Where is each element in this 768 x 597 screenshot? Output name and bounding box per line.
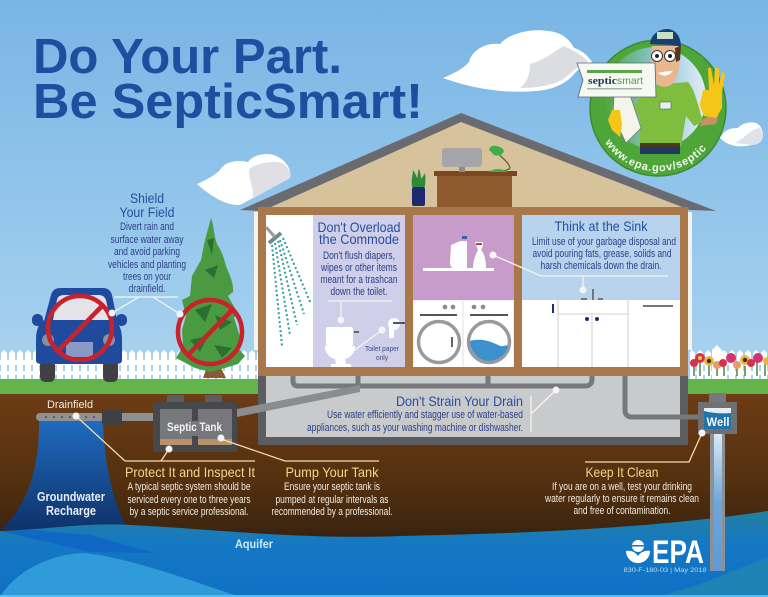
septic tank label: Septic Tank	[167, 420, 222, 434]
fence: left	[0, 349, 258, 379]
badge inner	[604, 47, 706, 149]
washer	[414, 301, 462, 367]
publication number: 830-F-180-03 | May 2018	[624, 567, 707, 574]
flowers	[690, 353, 768, 376]
outlet pipe to septic tank	[237, 385, 360, 417]
cloud: top centre	[443, 30, 592, 92]
text: don't overload: wipes or other items	[320, 262, 397, 274]
drain callout	[531, 386, 560, 432]
cloud: right	[720, 122, 763, 146]
badge banner	[577, 63, 656, 97]
text: think at the sink	[532, 236, 676, 272]
drainfield pipe	[36, 410, 154, 425]
EPA logo: EPA	[652, 534, 704, 570]
groundwater recharge label	[37, 489, 105, 518]
cloud: left of roof	[197, 154, 290, 205]
text: keep it clean	[544, 481, 699, 517]
kitchen cabinet details	[552, 289, 673, 367]
siding edges	[254, 212, 692, 350]
text: don't overload: Don't flush diapers,	[323, 250, 395, 262]
toilet paper label: Toilet paper	[365, 344, 399, 353]
text: shield your field	[108, 221, 186, 295]
text: think at the sink: avoid pouring fats, grease, solids and	[532, 248, 672, 260]
septic tank	[153, 395, 237, 452]
prohibition sign: car	[48, 296, 112, 360]
heading: shield your field: Your Field	[120, 204, 174, 220]
heading: keep it clean: Keep It Clean	[586, 464, 658, 480]
plant	[412, 169, 425, 206]
text: shield your field: Divert rain and	[120, 221, 174, 233]
text: don't strain your drain: appliances, such as your washing machine or dishwasher.	[307, 422, 523, 434]
title: Be SepticSmart!	[33, 75, 423, 129]
fence: right	[690, 345, 768, 379]
heading: pump your tank: Pump Your Tank	[286, 464, 379, 480]
dryer with water	[464, 301, 513, 367]
text: keep it clean: water regularly to ensure it remains clean	[544, 493, 699, 505]
heading: don't overload: Don't Overload	[318, 219, 400, 235]
bathroom lavender	[313, 215, 405, 367]
grass	[0, 379, 768, 394]
soil	[0, 394, 768, 539]
text: pump your tank: recommended by a professional.	[272, 506, 392, 518]
groundwater recharge label: Groundwater	[37, 489, 105, 504]
heading: shield your field	[120, 190, 174, 220]
heading: don't strain your drain: Don't Strain Your Drain	[396, 393, 523, 409]
well	[698, 393, 737, 571]
toilet paper	[355, 318, 405, 350]
keep it clean callout	[585, 430, 706, 462]
attic beige	[262, 119, 688, 208]
text: shield your field: vehicles and planting	[108, 259, 186, 271]
groundwater recharge plume	[0, 420, 155, 553]
text: shield your field: trees on your	[123, 271, 171, 283]
text: protect it: by a septic service professional.	[130, 506, 248, 518]
commode callout	[328, 301, 392, 324]
badge ring	[590, 40, 726, 176]
text: shield your field: drainfield.	[128, 283, 166, 295]
callouts: protect and pump	[72, 412, 379, 461]
title	[33, 30, 423, 129]
text: shield your field: surface water away	[110, 234, 184, 246]
toilet paper label: only	[376, 353, 388, 362]
text: don't overload: meant for a trashcan	[320, 274, 398, 286]
plume overlay in water	[0, 530, 155, 553]
text: don't overload: down the toilet.	[330, 286, 388, 298]
desk with monitor and lamp	[434, 146, 517, 207]
aquifer light patch	[0, 553, 240, 597]
mascot	[608, 29, 725, 154]
house frame	[258, 207, 688, 376]
house	[240, 113, 716, 445]
roof	[240, 113, 716, 211]
laundry lower	[413, 300, 514, 367]
car	[32, 288, 127, 382]
shower	[266, 227, 311, 346]
heading: don't overload	[318, 219, 400, 247]
bathroom white	[266, 215, 313, 367]
basement	[258, 376, 688, 445]
text: pump your tank: Ensure your septic tank is	[284, 481, 380, 493]
text: pump your tank	[272, 481, 392, 518]
badge banner: smart	[617, 75, 643, 87]
sky background	[0, 0, 768, 400]
aquifer right patch	[657, 557, 768, 597]
shelf and bottles	[423, 236, 494, 271]
text: pump your tank: pumped at regular intervals as	[276, 494, 389, 506]
text: keep it clean: If you are on a well, test your drinking	[552, 481, 692, 493]
well label: Well	[706, 415, 730, 429]
text: keep it clean: and free of contamination.	[574, 505, 670, 517]
heading: protect it: Protect It and Inspect It	[125, 464, 255, 480]
heading: think at the sink: Think at the Sink	[554, 218, 648, 234]
bottom strip	[0, 595, 768, 597]
laundry room	[413, 215, 514, 300]
toilet	[325, 327, 359, 367]
text: protect it: serviced every one to three years	[128, 494, 251, 506]
text: protect it	[128, 481, 251, 518]
tree	[176, 218, 245, 378]
basement interior	[266, 376, 680, 437]
text: don't strain your drain: Use water efficiently and stagger use of water-based	[327, 409, 523, 421]
drainfield label: Drainfield	[47, 399, 93, 411]
EPA logo	[624, 534, 707, 574]
kitchen cabinets	[522, 300, 680, 367]
heading: don't overload: the Commode	[319, 231, 399, 247]
sink callout	[490, 252, 668, 294]
text: don't overload	[320, 250, 398, 298]
text: shield your field: and avoid parking	[114, 246, 180, 258]
text: don't strain your drain	[307, 409, 523, 434]
basement pipes	[293, 376, 698, 417]
prohibition sign: tree	[178, 300, 242, 364]
text: protect it: A typical septic system should be	[128, 481, 250, 493]
groundwater recharge label: Recharge	[46, 503, 96, 518]
heading: shield your field: Shield	[130, 190, 164, 206]
kitchen wall	[522, 215, 680, 300]
toilet paper label	[365, 344, 399, 362]
badge url: www.epa.gov/septic	[606, 139, 706, 174]
badge banner: septic	[588, 76, 617, 87]
septicsmart badge	[576, 29, 727, 177]
text: think at the sink: harsh chemicals down the drain.	[540, 260, 662, 272]
aquifer water	[0, 511, 768, 597]
aquifer label: Aquifer	[235, 537, 273, 551]
shield callout	[108, 297, 184, 318]
text: think at the sink: Limit use of your garbage disposal and	[532, 236, 676, 248]
title: Do Your Part.	[33, 30, 342, 84]
